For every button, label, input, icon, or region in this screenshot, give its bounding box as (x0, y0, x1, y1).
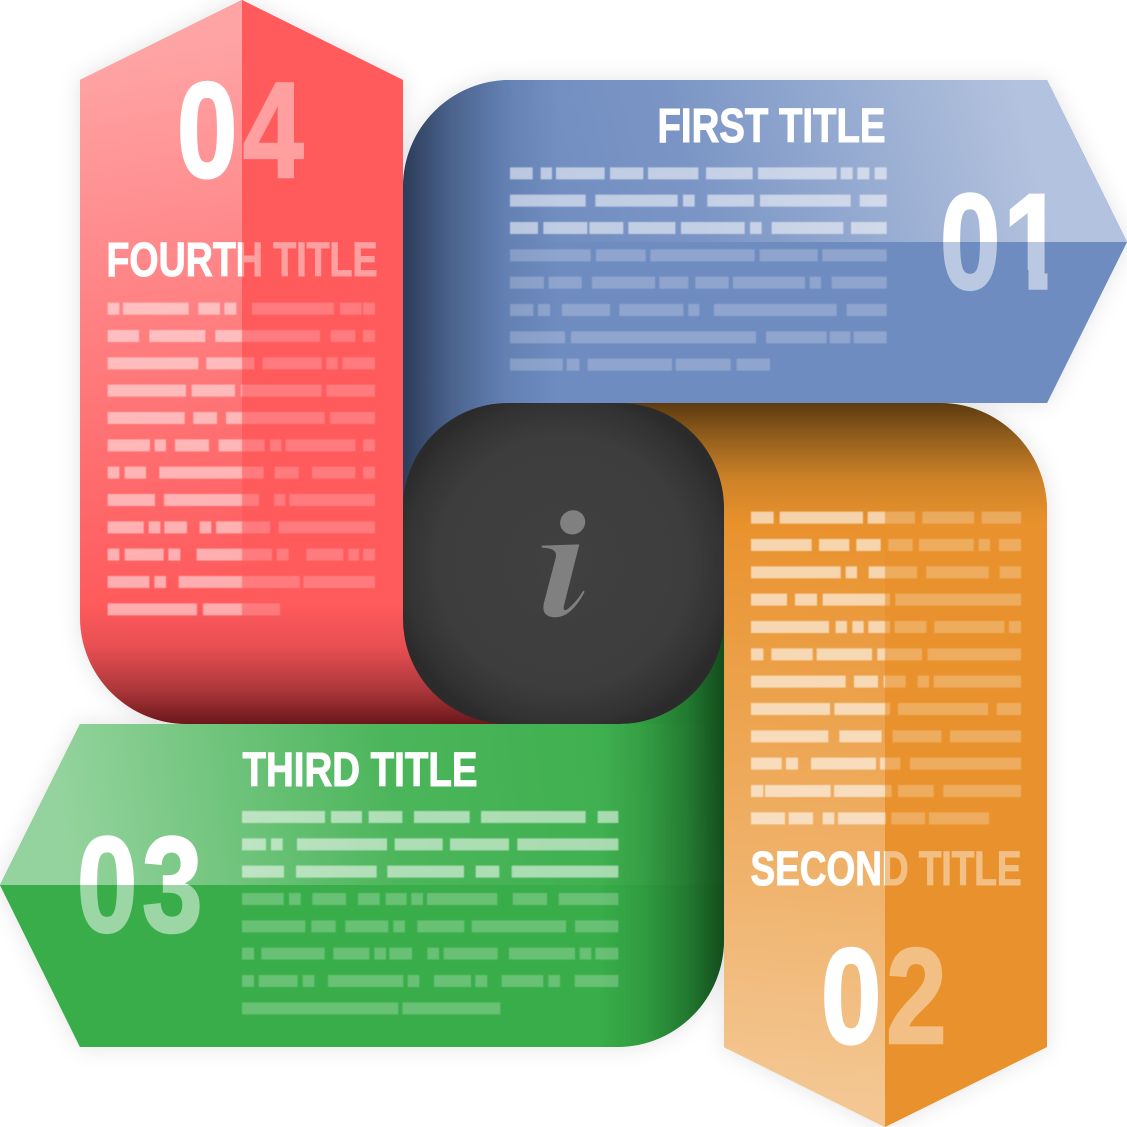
icon: information mark (542, 506, 589, 617)
heading: third title: THIRD TITLE (242, 744, 478, 797)
number: 03: 03 (77, 810, 203, 961)
panel: second (orange arrow) (600, 403, 1047, 1127)
number: 01: 01 (940, 167, 1064, 318)
text block: second body (751, 518, 1021, 818)
heading: fourth title: FOURTH TITLE (106, 234, 378, 287)
number: 02: 02 (821, 922, 947, 1073)
panel: third (green arrow) (0, 600, 724, 1047)
text block: first body (510, 173, 887, 365)
panel: centre info tile (403, 403, 724, 724)
panel: fourth (red arrow) (80, 0, 530, 724)
heading: second title: SECOND TITLE (750, 843, 1022, 896)
text block: fourth body (108, 309, 375, 609)
panel: first (blue arrow) (403, 80, 1127, 530)
number: 04: 04 (177, 56, 304, 207)
heading: first title: FIRST TITLE (658, 100, 886, 153)
text block: third body (242, 817, 618, 1008)
